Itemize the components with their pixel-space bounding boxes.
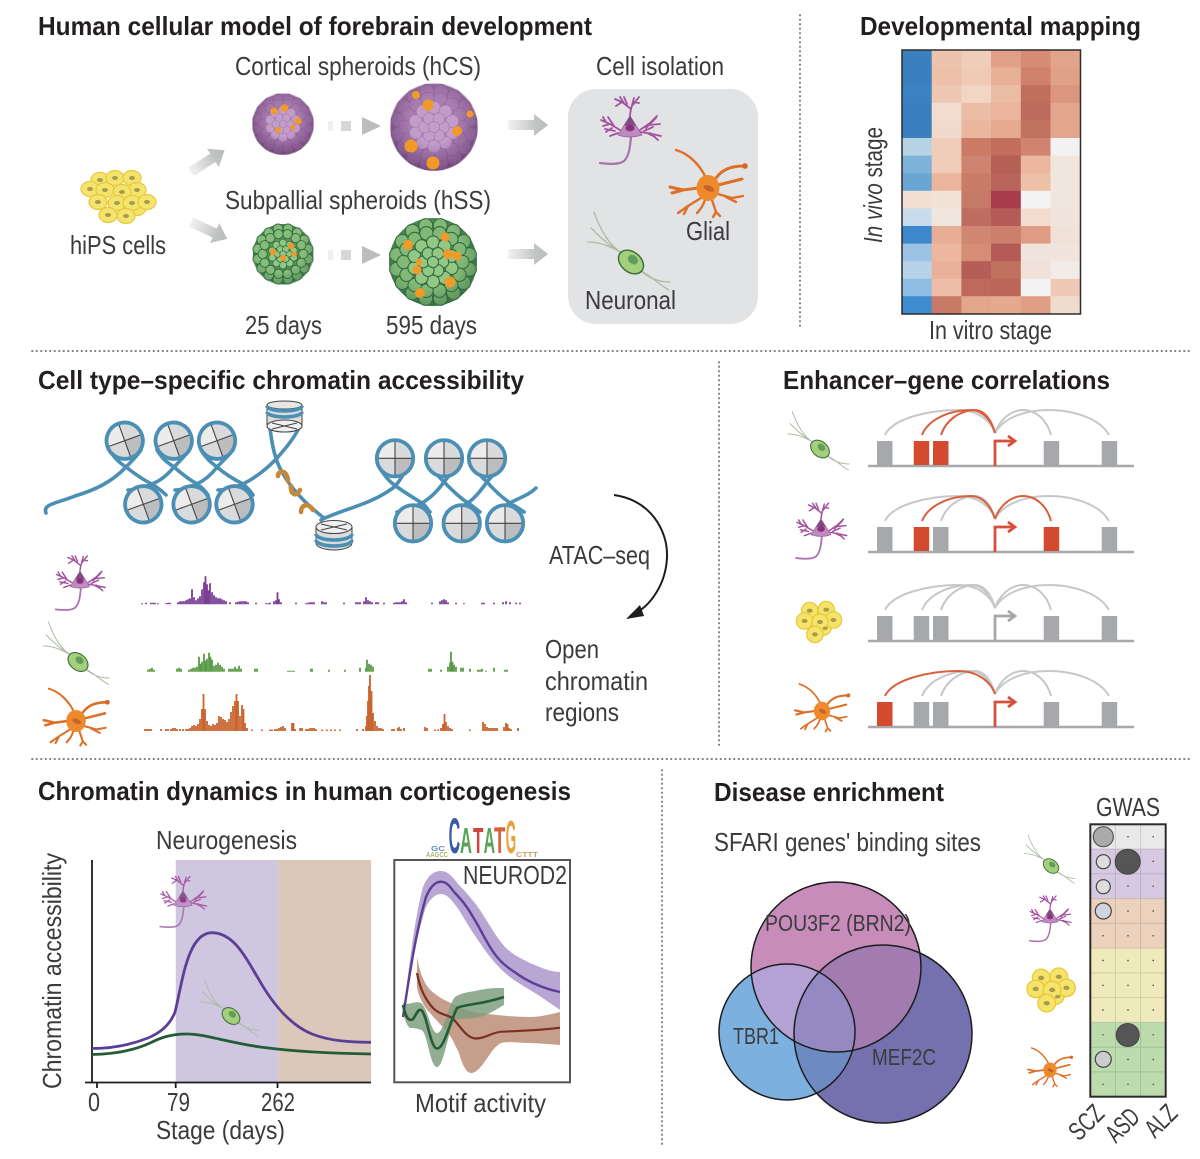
icon: pyramidal neuron: [160, 876, 207, 927]
icon: glial cell: [670, 150, 748, 217]
icon: bipolar neuron: [44, 622, 109, 684]
icon: hiPS cell cluster: [796, 601, 842, 643]
label: ATAC-seq: ATAC–seq: [549, 540, 650, 570]
sequence logo: CATATG: A: [460, 821, 472, 861]
label: GWAS: GWAS: [1096, 792, 1160, 822]
title: chromatin accessibility: Cell type–specific chromatin accessibility: [38, 365, 524, 395]
column label: ALZ: ALZ: [1138, 1098, 1183, 1143]
label: glial: Glial: [686, 216, 730, 246]
title: human cellular model: Human cellular model of forebrain development: [38, 11, 592, 41]
sequence logo: CATATG: GC: [431, 846, 445, 853]
axis label: motif activity: Motif activity: [415, 1088, 546, 1118]
title: chromatin dynamics: Chromatin dynamics in human corticogenesis: [38, 776, 571, 806]
tick labels: 0: [88, 1087, 100, 1117]
column label: ASD: ASD: [1099, 1102, 1146, 1148]
row: hiPS enhancer diagram: [868, 585, 1134, 641]
label: open chromatin regions: chromatin: [545, 666, 648, 696]
label: cortical spheroids: Cortical spheroids (hCS): [235, 51, 481, 81]
track: purple ATAC signal: [142, 576, 520, 604]
label: open chromatin regions: regions: [545, 697, 619, 727]
label: POU3F2 (BRN2): POU3F2 (BRN2): [765, 910, 911, 936]
sequence logo: CATATG: AAGCC: [426, 852, 448, 859]
axis label: chromatin accessibility: Chromatin accessibility: [37, 853, 67, 1089]
sequence logo: CATATG: CTTT: [516, 852, 539, 859]
icon: pyramidal neuron: [796, 503, 847, 559]
panel: disease enrichment: [714, 777, 1183, 1148]
title: enhancer-gene correlations: Enhancer–gene correlations: [783, 365, 1110, 395]
axis label: in vitro stage: In vitro stage: [929, 315, 1052, 345]
icon: hiPS cell cluster: [81, 170, 156, 224]
axis label: in vivo stage: In vivo stage: [858, 127, 888, 243]
label: hiPS cells: hiPS cells: [70, 230, 166, 260]
label: subpallial spheroids: Subpallial spheroids (hSS): [225, 185, 491, 215]
heatmap: [902, 50, 1080, 314]
column label: SCZ: SCZ: [1062, 1098, 1110, 1146]
sequence logo: CATATG: G: [506, 812, 516, 864]
sequence logo: CATATG: C: [449, 807, 460, 864]
label: open chromatin regions: Open: [545, 634, 599, 664]
icon: glial cell: [1028, 1048, 1073, 1087]
panel: cell isolation box: [568, 89, 758, 324]
axis label: stage (days): Stage (days): [156, 1115, 285, 1145]
arrow: hCS progression: [328, 117, 381, 135]
label: TBR1: TBR1: [733, 1023, 779, 1049]
arrow: hiPS to hSS: [186, 212, 232, 249]
tick labels: [88, 1087, 295, 1117]
title: disease enrichment: Disease enrichment: [714, 777, 944, 807]
track: green ATAC signal: [148, 652, 507, 672]
panel: cell type-specific chromatin accessibility: [38, 365, 667, 746]
spheroid: large hCS: [390, 83, 478, 171]
arrow: hSS progression: [328, 246, 381, 264]
spheroid: large hSS: [389, 218, 477, 306]
label: neuronal: Neuronal: [585, 285, 676, 315]
arrow: hSS to isolation: [508, 243, 548, 265]
spheroid: small hCS: [252, 93, 314, 155]
label: MEF2C: MEF2C: [872, 1044, 936, 1070]
label: cell isolation: Cell isolation: [596, 51, 724, 81]
label: neurogenesis: Neurogenesis: [156, 825, 297, 855]
row: glial enhancer diagram: [868, 671, 1134, 727]
tick labels: 262: [261, 1087, 295, 1117]
arrow: hCS to isolation: [508, 114, 548, 136]
icon: pyramidal neuron: [56, 556, 105, 610]
line chart: NEUROD2 motif activity: [394, 860, 570, 1082]
panel: human cellular model of forebrain development: [38, 11, 758, 340]
label: open chromatin regions: [545, 634, 648, 727]
icon: glial cell: [795, 684, 850, 732]
line chart: accessibility over stage: [85, 860, 371, 1088]
label: 25 days: 25 days: [245, 310, 322, 340]
arrow: hiPS to hCS: [185, 141, 231, 181]
label: 595 days: 595 days: [386, 310, 477, 340]
venn diagram: [719, 882, 972, 1123]
title: developmental mapping: Developmental mapping: [860, 11, 1141, 41]
panel: developmental mapping: [858, 11, 1141, 345]
panel: enhancer-gene correlations: [783, 365, 1134, 732]
GWAS enrichment grid: [1090, 824, 1166, 1097]
row: pyramidal enhancer diagram: [868, 496, 1134, 552]
icon: bipolar neuron: [1024, 835, 1075, 883]
spheroid: small hSS: [252, 223, 314, 285]
arrow: ATAC-seq curve: [614, 495, 667, 619]
icon: bipolar neuron: [200, 980, 259, 1036]
sequence logo: CATATG: [426, 807, 539, 864]
label: NEUROD2: NEUROD2: [463, 860, 567, 890]
tick labels: 79: [167, 1087, 190, 1117]
icon: glial cell: [44, 689, 110, 746]
diagram: chromatin strand with nucleosomes: [45, 401, 536, 550]
row: neuronal enhancer diagram: [868, 410, 1134, 466]
track: orange ATAC signal: [145, 675, 518, 731]
panel: chromatin dynamics in human corticogenesis: [37, 776, 571, 1145]
sequence logo: CATATG: T: [473, 821, 483, 861]
sequence logo: CATATG: A: [484, 821, 495, 861]
label: SFARI genes binding sites: SFARI genes' binding sites: [714, 827, 981, 857]
icon: bipolar neuron: [788, 412, 849, 470]
sequence logo: CATATG: T: [494, 821, 505, 862]
icon: hiPS cell cluster: [1027, 968, 1075, 1012]
icon: pyramidal neuron: [1030, 896, 1071, 941]
icon: pyramidal neuron: [600, 97, 661, 164]
icon: bipolar neuron: [588, 212, 670, 290]
